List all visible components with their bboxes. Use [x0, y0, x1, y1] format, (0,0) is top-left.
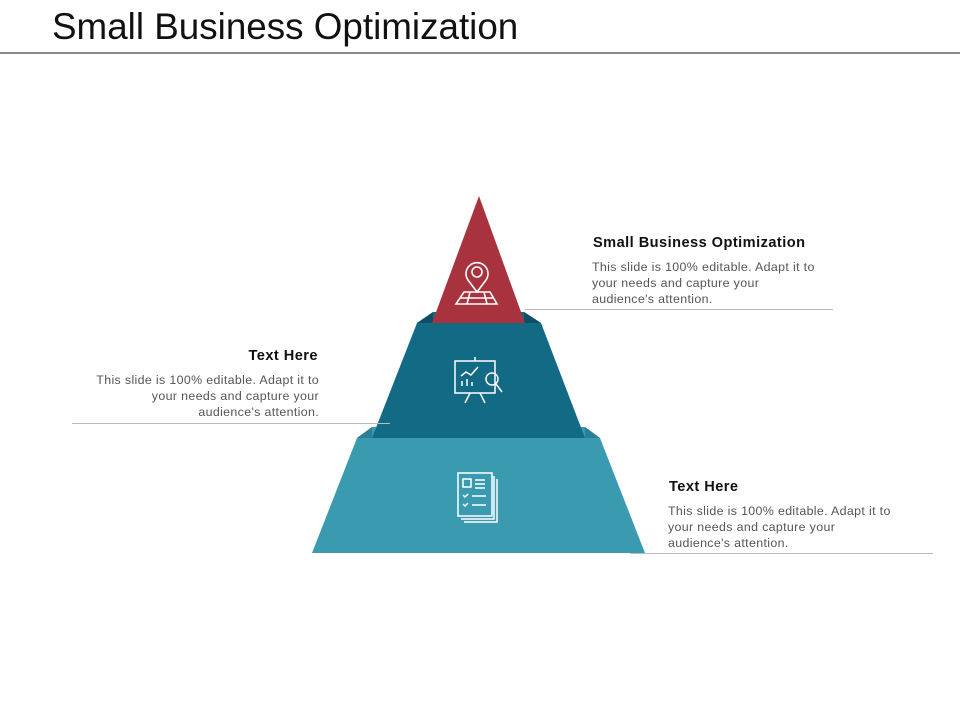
- text: This slide is 100% editable. Adapt it to: [592, 260, 815, 274]
- text: audience's attention.: [668, 536, 789, 550]
- text: your needs and capture your: [668, 520, 835, 534]
- text: This slide is 100% editable. Adapt it to: [668, 504, 891, 518]
- title: Small Business Optimization: [52, 6, 518, 47]
- text: Small Business Optimization: [593, 235, 805, 251]
- text: your needs and capture your: [592, 276, 759, 290]
- text block: bottom right: [630, 479, 933, 554]
- pyramid level 1 top: [432, 196, 525, 323]
- text: Text Here: [249, 348, 318, 364]
- text: Text Here: [669, 479, 738, 495]
- icon: presentation chart: [455, 357, 502, 403]
- text: your needs and capture your: [152, 389, 319, 403]
- pyramid level 2 middle: [372, 312, 585, 438]
- text: This slide is 100% editable. Adapt it to: [96, 373, 319, 387]
- text: audience's attention.: [592, 292, 713, 306]
- icon: map pin: [456, 263, 497, 304]
- text block: left: [72, 348, 390, 424]
- text block: top right: [525, 235, 833, 310]
- icon: document list: [458, 473, 497, 522]
- pyramid level 3 bottom: [312, 427, 645, 553]
- text: audience's attention.: [198, 405, 319, 419]
